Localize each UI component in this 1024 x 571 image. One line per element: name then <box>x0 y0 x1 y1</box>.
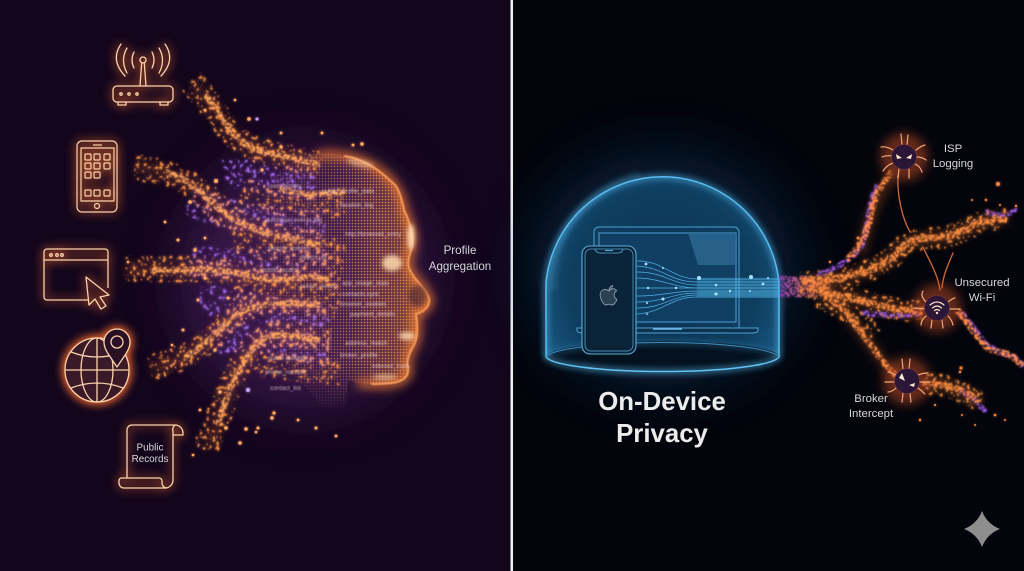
thin tendrils to threats <box>898 176 953 290</box>
ambient blue glow <box>533 155 793 385</box>
threat streams: purple strands <box>817 185 1023 412</box>
data streams: bright core <box>150 95 345 425</box>
data text fragments inside head: browser_cookies <box>340 301 386 308</box>
divider <box>510 0 513 571</box>
head silhouette <box>256 154 429 415</box>
stray particles <box>127 99 364 456</box>
label: profile aggregation: Aggregation <box>429 260 491 273</box>
data streams: purple scatter <box>190 174 330 352</box>
stray threat particles <box>829 182 1017 426</box>
data text fragments inside head <box>262 183 410 392</box>
data text fragments inside head: contact_list <box>270 385 301 392</box>
icon: globe with location pin <box>65 329 130 402</box>
data text fragments inside head: contacts.sync <box>342 291 380 298</box>
data streams: orange scatter <box>125 80 345 450</box>
icon: ISP logging threat <box>880 133 928 181</box>
threat streams: orange core <box>800 172 1022 398</box>
panel: on-device privacy (right) <box>533 133 1023 547</box>
data text fragments inside head: public_profile_data <box>322 188 375 195</box>
data text fragments inside head: purchase_events.log <box>265 217 323 224</box>
icon: wifi router <box>113 44 173 105</box>
label: profile aggregation: Profile <box>444 244 476 257</box>
data text fragments inside head: location_log <box>340 202 374 209</box>
nose shadow <box>409 285 427 307</box>
data text fragments inside head: app_usage_stats <box>342 280 389 287</box>
data text fragments inside head: search_queries <box>268 245 310 252</box>
data text fragments inside head: broker_profile <box>340 352 378 359</box>
label: broker intercept: Intercept <box>849 408 894 420</box>
data text fragments inside head: payment_details <box>350 311 395 318</box>
data text fragments inside head: http://browsed_entry <box>345 231 402 238</box>
threat streams: scatter <box>800 219 1007 403</box>
title: on-device privacy: Privacy <box>616 420 709 448</box>
label: ISP logging: Logging <box>933 158 973 170</box>
icon: apple logo <box>600 286 617 305</box>
leaking data bundle <box>780 276 830 297</box>
threat streams: glow <box>800 172 1007 403</box>
glow behind head <box>180 150 430 410</box>
data text fragments inside head: device_id <box>300 254 327 261</box>
laptop <box>577 227 758 333</box>
data text fragments inside head: phone_number <box>265 369 307 376</box>
label: public records: Public <box>137 442 164 454</box>
glass dome <box>546 175 780 373</box>
panel: left background <box>0 0 511 571</box>
data text fragments inside head: address_match <box>345 340 388 347</box>
facial highlights <box>346 157 415 380</box>
phone <box>582 246 636 354</box>
data text fragments inside head: public_record <box>300 283 338 290</box>
data text fragments inside head: inferred_traits <box>372 363 410 370</box>
icon: broker intercept threat <box>883 357 931 405</box>
label: public records: Records <box>132 454 168 465</box>
icon: smartphone <box>77 141 117 212</box>
label: ISP logging: ISP <box>944 143 962 155</box>
data text fragments inside head: public records <box>268 355 307 362</box>
panel: right background <box>513 0 1024 571</box>
icon: sparkle watermark <box>964 511 1000 547</box>
icon: browser window with cursor <box>44 249 109 309</box>
label: broker intercept: Broker <box>854 393 888 405</box>
icon: public records scroll <box>119 425 183 488</box>
data text fragments inside head: public record <box>262 267 298 274</box>
icon: unsecured wi-fi threat <box>913 284 961 332</box>
data text fragments inside head: user_history <box>268 183 303 190</box>
data streams: glow <box>125 85 330 445</box>
on-device data flow lines <box>637 261 780 315</box>
title: on-device privacy: On-Device <box>598 388 726 416</box>
label: unsecured wi-fi: Unsecured <box>954 277 1010 289</box>
panel: data aggregation (left) <box>44 44 491 488</box>
head rim glow <box>320 155 429 384</box>
label: unsecured wi-fi: Wi-Fi <box>969 292 995 304</box>
